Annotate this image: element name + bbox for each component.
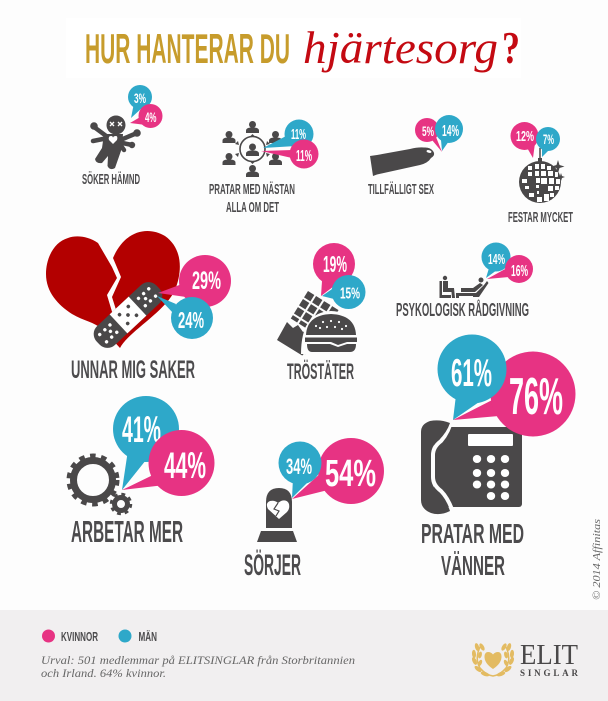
bubble: kvinnor 29%: 29% <box>192 267 221 295</box>
item: arbetar mer: ARBETAR MER <box>71 514 183 549</box>
bubble: kvinnor 19% <box>313 243 355 296</box>
label: pratar med nästan alla om det: PRATAR MED NÄSTAN <box>209 181 295 198</box>
icon: disco ball <box>519 148 565 203</box>
bubble: män 41%: 41% <box>122 409 161 450</box>
icon: condom <box>370 147 434 176</box>
footer panel <box>0 610 608 701</box>
label: pratar med vänner: PRATAR MED <box>421 518 524 549</box>
bubble: män 61%: 61% <box>451 352 492 395</box>
bubble: kvinnor 76% <box>453 352 576 436</box>
item: pratar med nästan alla <box>209 120 318 216</box>
bubble: kvinnor 16%: 16% <box>511 263 528 280</box>
item: arbetar mer <box>69 396 214 549</box>
bubble: män 3%: 3% <box>134 90 146 106</box>
label: pratar med vänner <box>421 518 524 581</box>
title: HUR HANTERAR DU <box>85 25 290 72</box>
label: söker hämnd: SÖKER HÄMND <box>82 171 140 188</box>
logo: elit singlar: ELIT <box>520 640 578 671</box>
item: festar mycket <box>508 122 573 226</box>
icon: desk phone <box>421 418 522 514</box>
item: sörjer: SÖRJER <box>244 549 301 582</box>
bubble: män 15%: 15% <box>340 286 360 302</box>
item: tröstäter: TRÖSTÄTER <box>287 359 354 384</box>
label: pratar med nästan alla om det <box>209 181 295 216</box>
bubble: män 41% <box>113 396 179 490</box>
bubble: kvinnor 5%: 5% <box>422 123 434 139</box>
icon: gravestone with broken heart <box>257 488 297 542</box>
bubble: män 7%: 7% <box>543 131 554 147</box>
bubble: män 11%: 11% <box>291 126 306 143</box>
bubble: kvinnor 54% <box>292 438 384 504</box>
bubble: kvinnor 12%: 12% <box>516 128 534 145</box>
icon: broken heart with bandage <box>46 231 180 352</box>
icon: therapist and couch <box>440 276 488 298</box>
sample note: Urval: 501 medlemmar på ELITSINGLAR från Storbritannien <box>41 654 355 667</box>
bubble: kvinnor 11%: 11% <box>296 148 312 165</box>
label: pratar med nästan alla om det: ALLA OM DET <box>226 199 279 216</box>
bubble: kvinnor 54%: 54% <box>325 453 376 495</box>
bubble: män 14%: 14% <box>442 123 459 140</box>
title: hjärtesorg <box>303 22 498 73</box>
label: tillfälligt sex: TILLFÄLLIGT SEX <box>368 181 434 198</box>
item: sörjer <box>244 438 384 582</box>
sample note: och Irland. 64% kvinnor. <box>41 668 166 680</box>
bubble: kvinnor 19%: 19% <box>323 251 347 277</box>
bubble: män 14%: 14% <box>488 251 505 268</box>
bubble: män 34% <box>278 442 322 498</box>
icon: voodoo doll <box>90 116 141 169</box>
title: ? <box>502 22 520 73</box>
bubble: män 34%: 34% <box>286 454 312 479</box>
item: psykologisk rådgivning <box>396 242 533 320</box>
logo: elit singlar <box>471 640 578 678</box>
sample note <box>41 654 355 680</box>
bubble: män 24% <box>157 296 213 339</box>
bubble: män 24%: 24% <box>178 307 204 333</box>
bubble: kvinnor 29% <box>158 255 231 307</box>
legend: KVINNOR <box>61 630 98 644</box>
bubble: män 15% <box>322 275 366 309</box>
legend: MÄN <box>138 629 157 644</box>
bubble: kvinnor 44% <box>122 430 214 496</box>
icon: chocolate and burger <box>277 291 361 357</box>
bubble: kvinnor 4%: 4% <box>145 109 157 125</box>
icon: network of people <box>222 121 282 177</box>
item: tröstäter <box>277 243 366 384</box>
icon: gears <box>69 456 130 514</box>
bubble: kvinnor 44%: 44% <box>164 445 206 486</box>
label: pratar med vänner: VÄNNER <box>441 550 505 581</box>
item: pratar med vänner <box>421 334 576 581</box>
item: tillfälligt sex <box>368 115 463 198</box>
legend <box>42 629 157 644</box>
item: unnar mig saker <box>46 231 231 384</box>
label: unnar mig saker: UNNAR MIG SAKER <box>71 356 195 384</box>
logo: elit singlar: SINGLAR <box>520 668 578 678</box>
item: söker hämnd <box>82 85 162 188</box>
copyright note: © 2014 Affinitas <box>591 519 603 600</box>
bubble: män 61% <box>438 334 506 420</box>
